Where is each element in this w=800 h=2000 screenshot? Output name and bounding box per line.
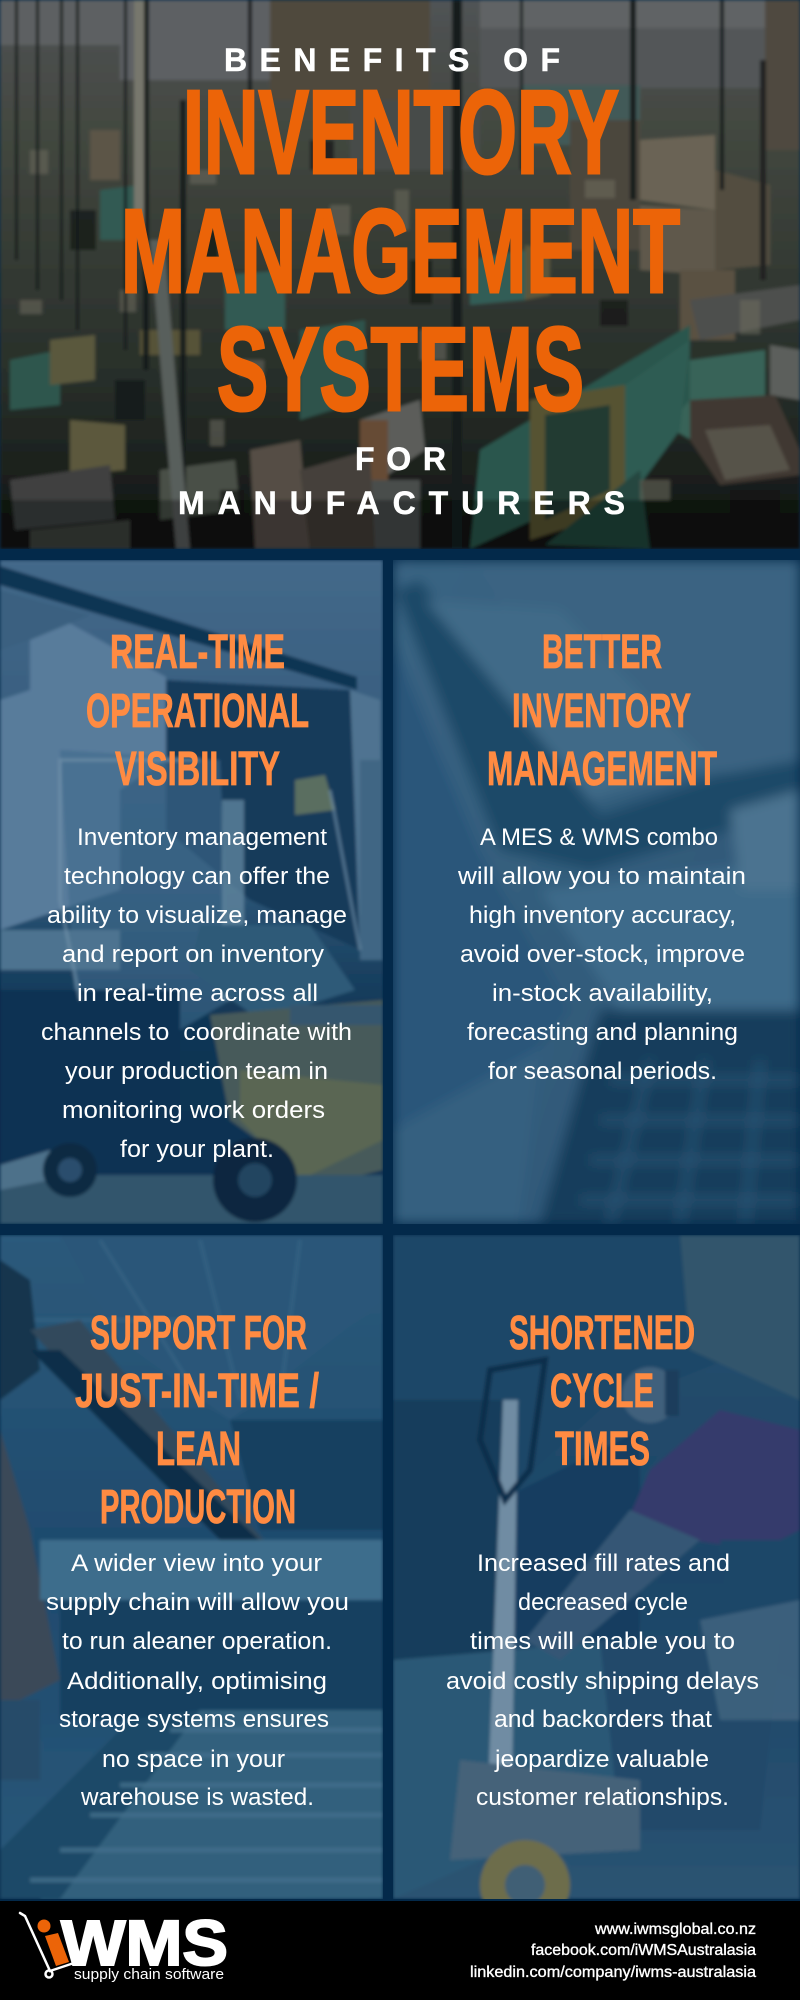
body text: channels to coordinate with — [41, 1019, 352, 1046]
contact links: linkedin.com/company/iwms-australasia — [470, 1964, 756, 1981]
title: inventory management systems: SYSTEMS — [217, 303, 584, 436]
panel: support for just-in-time / lean production — [0, 1235, 383, 1900]
body text — [46, 1550, 349, 1811]
body text: monitoring work orders — [62, 1097, 325, 1124]
body text: for your plant. — [120, 1136, 274, 1163]
body text — [446, 1550, 759, 1811]
heading: SUPPORT FOR — [90, 1307, 307, 1360]
body text: supply chain will allow you — [46, 1589, 349, 1616]
heading: VISIBILITY — [115, 743, 280, 796]
body text: and backorders that — [494, 1706, 712, 1733]
body text: avoid over-stock, improve — [460, 941, 745, 968]
body text: and report on inventory — [62, 941, 324, 968]
body text: decreased cycle — [518, 1589, 688, 1616]
contact links — [470, 1921, 756, 1981]
body text: your production team in — [65, 1058, 328, 1085]
heading — [487, 626, 717, 796]
heading: REAL-TIME — [110, 626, 285, 679]
panel: better inventory management — [393, 560, 800, 1224]
title: inventory management systems — [121, 66, 680, 436]
footer — [0, 1901, 800, 2000]
heading: TIMES — [555, 1423, 650, 1476]
heading: for manufacturers — [178, 441, 625, 521]
panel: shortened cycle times — [393, 1235, 800, 1930]
body text: Inventory management — [77, 824, 327, 851]
heading: for manufacturers: MANUFACTURERS — [178, 485, 625, 521]
panel photo: forklift at truck — [0, 560, 383, 1224]
body text: no space in your — [102, 1746, 285, 1773]
body text: Additionally, optimising — [67, 1668, 327, 1695]
body text: high inventory accuracy, — [469, 902, 736, 929]
body text: jeopardize valuable — [494, 1746, 709, 1773]
body text — [457, 824, 746, 1085]
panel photo: robot arm and conveyor — [0, 1235, 383, 1900]
body text: times will enable you to — [470, 1628, 735, 1655]
body text: will allow you to maintain — [457, 863, 746, 890]
icon: hand truck — [20, 1913, 74, 1978]
header section — [0, 0, 800, 549]
panel photo: laptop and notes — [393, 560, 800, 1224]
heading: for manufacturers: FOR — [355, 441, 446, 477]
panel photo: worker with pallet truck — [393, 1235, 800, 1930]
logo: iWMS supply chain software — [20, 1907, 228, 1983]
body text: storage systems ensures — [59, 1706, 329, 1733]
body text: ability to visualize, manage — [47, 902, 347, 929]
heading — [86, 626, 309, 796]
heading — [509, 1307, 695, 1476]
body text: warehouse is wasted. — [80, 1784, 314, 1811]
body text: Increased fill rates and — [477, 1550, 730, 1577]
body text: forecasting and planning — [467, 1019, 738, 1046]
heading: LEAN — [156, 1423, 241, 1476]
heading: BETTER — [542, 626, 662, 679]
heading: benefits of: BENEFITS OF — [224, 42, 560, 78]
logo tagline: supply chain software — [74, 1966, 224, 1983]
contact links: facebook.com/iWMSAustralasia — [531, 1942, 756, 1959]
body text: A wider view into your — [71, 1550, 322, 1577]
body text: to run aleaner operation. — [62, 1628, 332, 1655]
heading: OPERATIONAL — [86, 685, 309, 738]
body text: avoid costly shipping delays — [446, 1668, 759, 1695]
icon: orange i — [38, 1920, 69, 1966]
heading: PRODUCTION — [100, 1481, 296, 1534]
panel: real-time operational visibility — [0, 560, 383, 1224]
body text — [41, 824, 352, 1163]
heading: JUST-IN-TIME / — [75, 1365, 319, 1418]
footer background — [0, 1901, 800, 2000]
body text: customer relationships. — [476, 1784, 729, 1811]
body text: in-stock availability, — [492, 980, 713, 1007]
body text: technology can offer the — [64, 863, 330, 890]
contact links: www.iwmsglobal.co.nz — [594, 1921, 756, 1938]
logo wordmark: WMS — [61, 1907, 228, 1979]
heading: CYCLE — [550, 1365, 654, 1418]
header photo: factory floor — [0, 0, 800, 549]
body text: in real-time across all — [77, 980, 318, 1007]
body text: A MES & WMS combo — [480, 824, 718, 851]
heading: INVENTORY — [512, 685, 691, 738]
heading — [75, 1307, 319, 1534]
body text: for seasonal periods. — [488, 1058, 717, 1085]
